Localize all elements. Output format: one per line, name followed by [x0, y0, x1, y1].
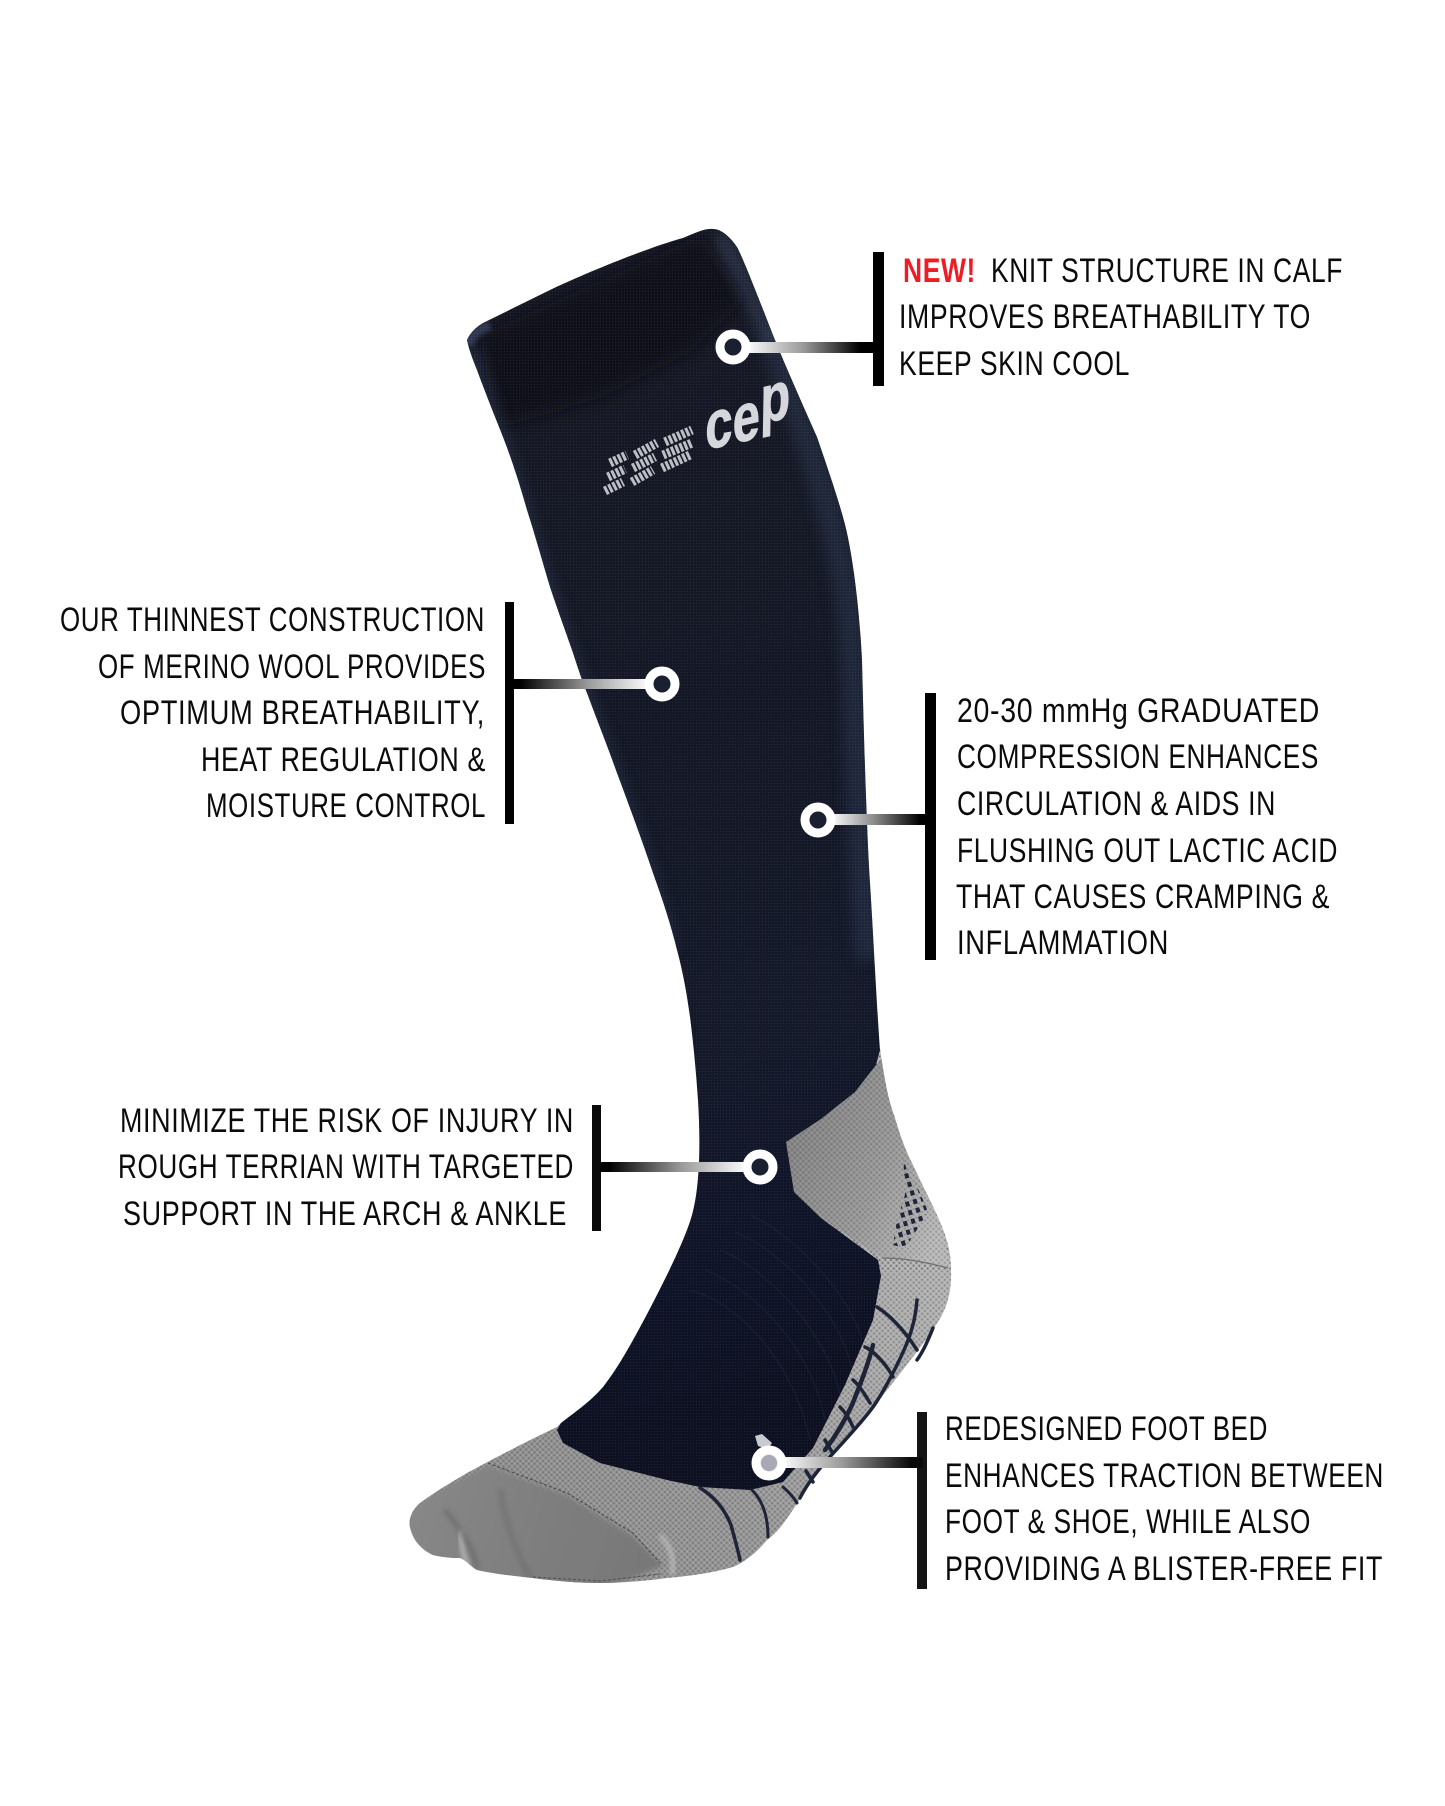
callout text: OF MERINO WOOL PROVIDES	[98, 648, 486, 686]
callout text	[945, 1410, 1384, 1588]
grey heel, sole and toe	[400, 1040, 960, 1590]
callout text: THAT CAUSES CRAMPING &	[956, 878, 1330, 916]
callout: knit structure in calf	[720, 252, 1343, 386]
compression sock illustration	[400, 220, 960, 1590]
sock logo: cep	[605, 356, 791, 491]
marker ring	[649, 671, 675, 697]
marker ring	[720, 334, 746, 360]
navy sock body	[450, 220, 890, 1500]
callout text: FLUSHING OUT LACTIC ACID	[957, 832, 1338, 870]
callout: graduated compression	[805, 692, 1338, 962]
connector line	[745, 342, 875, 353]
callout text: 20-30 mmHg GRADUATED	[957, 692, 1320, 730]
callout text: INFLAMMATION	[957, 924, 1169, 962]
marker ring	[747, 1154, 773, 1180]
callout text: CIRCULATION & AIDS IN	[957, 785, 1276, 823]
callout text: FOOT & SHOE, WHILE ALSO	[945, 1503, 1311, 1541]
connector line	[780, 1457, 923, 1468]
marker ring	[805, 807, 831, 833]
callout text: KEEP SKIN COOL	[899, 345, 1130, 383]
callout bar	[505, 602, 514, 824]
callout: merino wool construction	[60, 601, 675, 825]
callout bar	[873, 252, 884, 386]
callout bar	[592, 1105, 601, 1231]
connector line	[830, 814, 927, 825]
callout text: ROUGH TERRIAN WITH TARGETED	[118, 1148, 574, 1186]
callout text: COMPRESSION ENHANCES	[957, 738, 1319, 776]
callout text: HEAT REGULATION &	[201, 741, 486, 779]
callout: arch and ankle support	[118, 1102, 773, 1233]
callout text	[956, 692, 1338, 962]
marker ring	[756, 1450, 782, 1476]
callout text	[60, 601, 486, 825]
callout text: NEW!	[903, 252, 976, 290]
small sock tag	[755, 1434, 772, 1449]
callout bar	[925, 693, 936, 960]
sock logo: cep: cep	[705, 356, 791, 465]
logo stripes	[605, 430, 692, 491]
infographic canvas	[61, 228, 1382, 1589]
callout text: OUR THINNEST CONSTRUCTION	[60, 601, 485, 639]
callout text: REDESIGNED FOOT BED	[945, 1410, 1268, 1448]
callout text	[118, 1102, 574, 1233]
callout text: MOISTURE CONTROL	[206, 787, 486, 825]
callout text: IMPROVES BREATHABILITY TO	[899, 298, 1311, 336]
callout: redesigned foot bed	[755, 1410, 1384, 1589]
connector line	[600, 1162, 750, 1172]
heel dot pattern	[893, 1150, 928, 1248]
callout text: KNIT STRUCTURE IN CALF	[991, 252, 1343, 290]
callout text: MINIMIZE THE RISK OF INJURY IN	[120, 1102, 574, 1140]
callout text: SUPPORT IN THE ARCH & ANKLE	[123, 1195, 567, 1233]
callout bar	[917, 1412, 927, 1589]
callout text: OPTIMUM BREATHABILITY,	[120, 694, 485, 732]
sole lattice lines	[700, 1300, 933, 1560]
callout text	[899, 252, 1343, 383]
connector line	[513, 679, 653, 689]
